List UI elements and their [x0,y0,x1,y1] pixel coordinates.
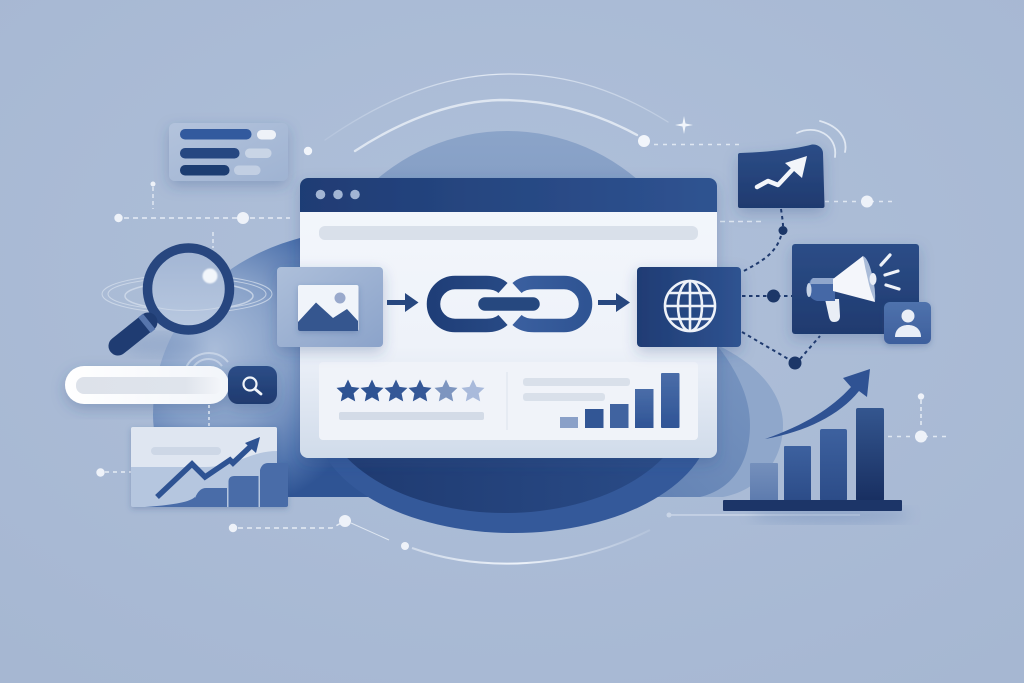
browser title bar [300,178,717,212]
network nodes [767,226,802,370]
browser window [300,178,717,458]
star rating [336,380,484,401]
search button [228,366,277,404]
trend arrow [157,437,260,497]
chain link icon [434,282,586,326]
connector dots bottom [96,468,860,564]
globe icon [665,281,715,331]
sound rays [881,255,899,289]
chart baseline [723,500,902,511]
ripple behind search [186,353,228,368]
area bars [145,463,288,507]
bottom panel [319,362,698,440]
magnifier [102,248,272,357]
globe card [637,267,741,347]
chart card [131,427,288,507]
growth arrow [765,369,870,439]
megaphone card [792,244,919,334]
arrow: image to link [387,293,418,312]
network connectors [742,209,820,360]
dashes below search [208,405,210,427]
growth bars [750,408,884,501]
connector dots left [114,182,290,248]
arrow: link to globe [598,293,630,312]
small bar chart [560,373,680,428]
list card [169,123,288,181]
profile badge [884,302,931,344]
decorative arcs top [325,74,668,151]
rating text line [339,412,484,420]
connector dots top [304,116,740,155]
search bar [65,366,277,404]
trend card [738,144,824,208]
search input placeholder [76,377,222,394]
connector dots right [720,196,947,442]
person icon [895,310,921,337]
list rows [180,129,276,176]
search icon [244,378,261,394]
signal arcs [797,121,846,157]
image card [277,267,383,347]
megaphone icon [806,255,899,322]
window buttons [316,190,360,199]
text lines [523,378,630,386]
growth bar chart [723,369,910,523]
trend arrow icon [757,156,807,187]
orbit ellipses [102,275,272,313]
address bar [319,226,698,240]
image icon [298,285,358,331]
background blobs [153,131,783,533]
